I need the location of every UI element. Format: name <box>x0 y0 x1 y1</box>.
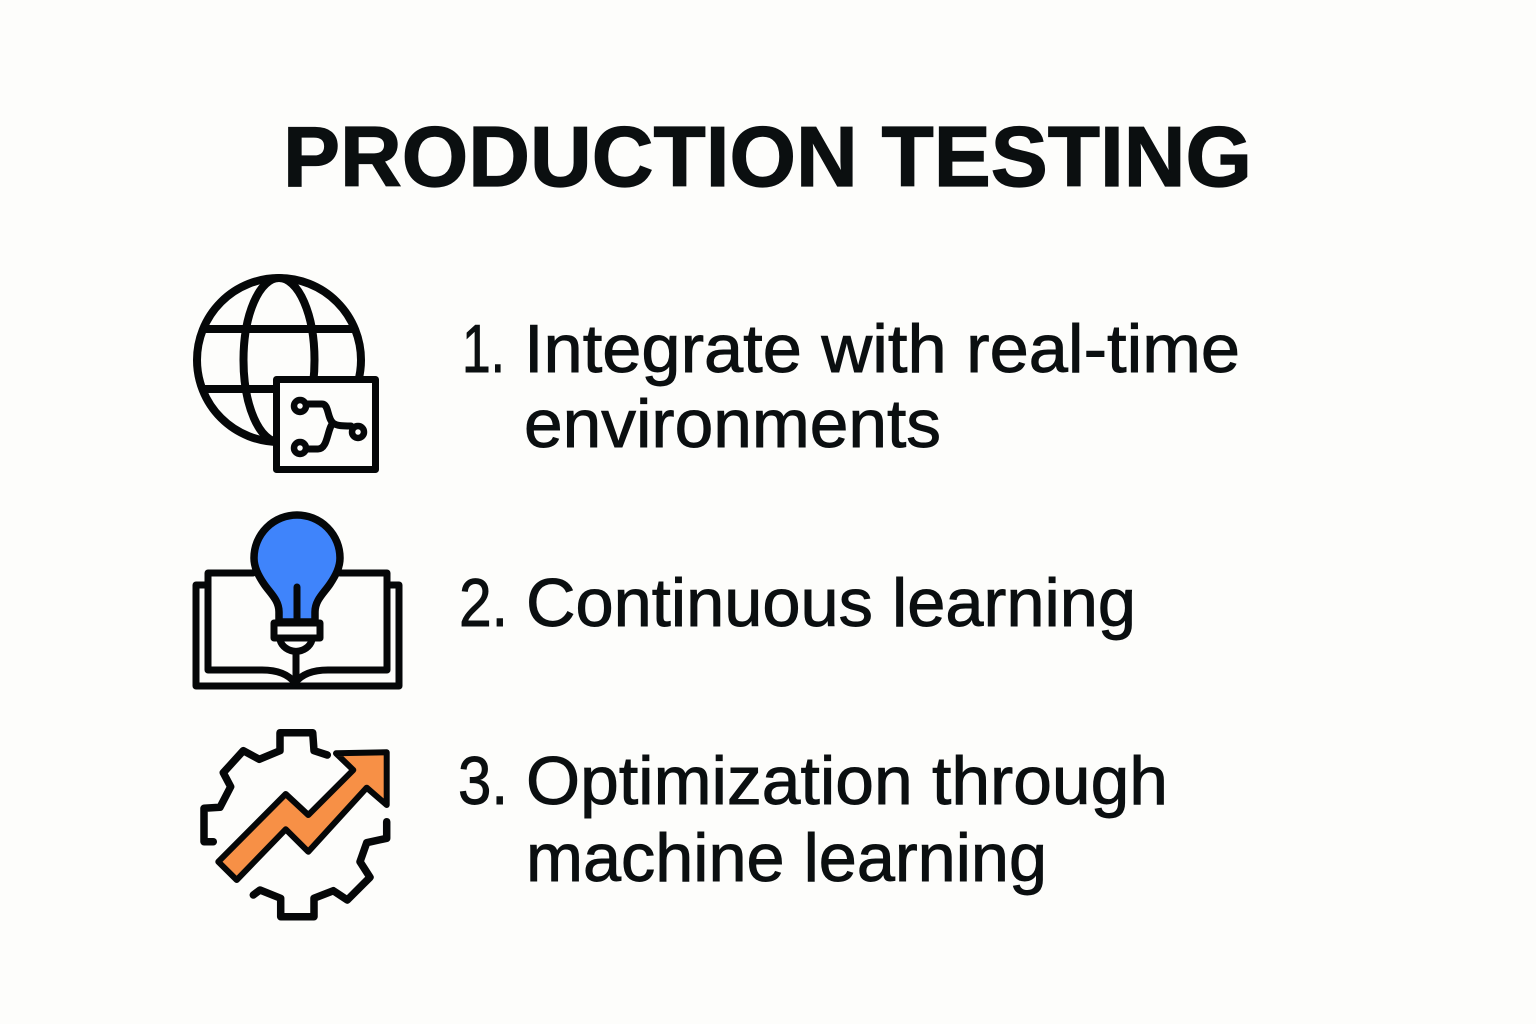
item 2: text: Continuous learning <box>526 565 1136 641</box>
item 2: text: 2. <box>459 565 508 641</box>
item 1: text: 1. <box>462 311 505 387</box>
item 2: book and light bulb icon <box>196 515 399 686</box>
item 1: text: Integrate with real-time <box>524 311 1240 387</box>
item 3: text: machine learning <box>526 820 1047 896</box>
item 3: text: Optimization through <box>526 743 1168 819</box>
item 1: globe and network icon <box>197 278 376 470</box>
item 3: gear and growth arrow icon <box>204 733 387 917</box>
item 3: text: 3. <box>458 743 508 819</box>
item 3: text <box>458 743 1168 896</box>
item 1: text: environments <box>524 386 941 462</box>
item 1: text <box>462 311 1240 462</box>
title: PRODUCTION TESTING <box>283 110 1252 205</box>
